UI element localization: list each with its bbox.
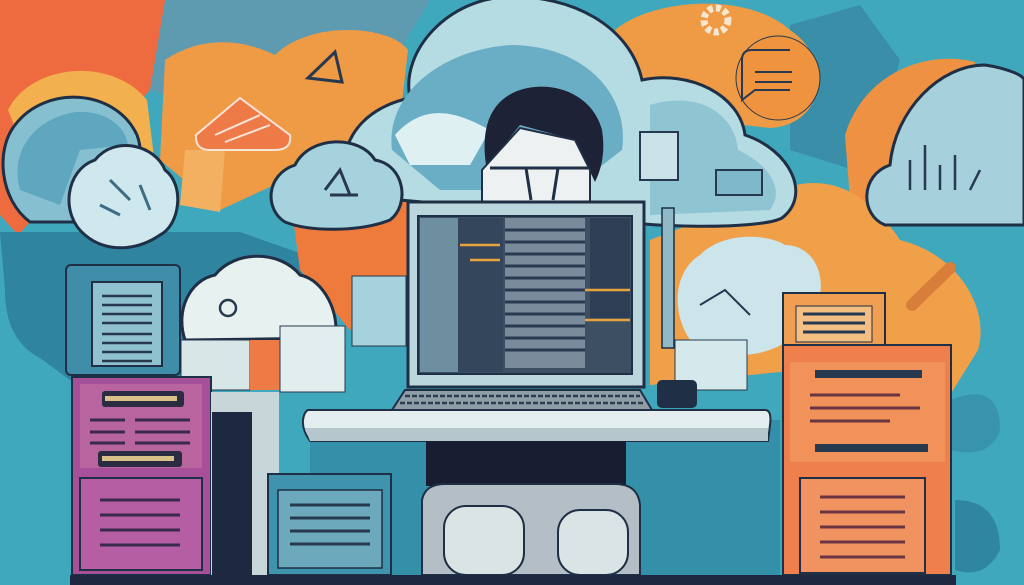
orange badge cloud xyxy=(196,98,290,150)
background: orange corner xyxy=(0,0,210,235)
cloud: far left xyxy=(3,97,140,222)
torso and legs xyxy=(422,441,640,575)
cabinet: blue top left xyxy=(66,265,180,375)
paper sheets xyxy=(181,276,747,392)
triangle icon top xyxy=(308,52,342,82)
icon: pen xyxy=(912,268,950,305)
icon: server xyxy=(640,132,678,180)
screen xyxy=(418,216,632,374)
glasses xyxy=(490,168,590,200)
icon: small triangle xyxy=(325,170,358,195)
cabinet: dark side xyxy=(211,392,279,575)
right cloud xyxy=(867,65,1024,225)
cloud: small mid-left xyxy=(271,142,402,229)
mug xyxy=(657,380,697,408)
hair xyxy=(485,87,603,182)
circle: speech bubble orange xyxy=(736,36,820,120)
cabinet: small blue xyxy=(268,474,391,575)
stand xyxy=(662,208,674,348)
icon: chat lines xyxy=(742,50,792,100)
cloud: left white xyxy=(69,146,178,248)
keyboard xyxy=(392,390,652,410)
face xyxy=(482,128,590,202)
person xyxy=(482,87,603,202)
cabinet: orange small top xyxy=(783,293,885,345)
cabinet: orange large xyxy=(783,345,951,575)
left cloud group xyxy=(3,97,178,248)
cabinet: purple xyxy=(72,377,211,575)
icon: panel xyxy=(716,170,762,195)
large central cloud xyxy=(271,0,796,229)
icon: gear xyxy=(704,8,728,32)
background: orange clouds xyxy=(8,4,981,395)
laptop xyxy=(392,202,652,410)
cloud: mid right xyxy=(678,237,821,355)
desk xyxy=(303,410,770,441)
cloud: mid left xyxy=(182,256,336,340)
floor bar xyxy=(70,575,956,585)
